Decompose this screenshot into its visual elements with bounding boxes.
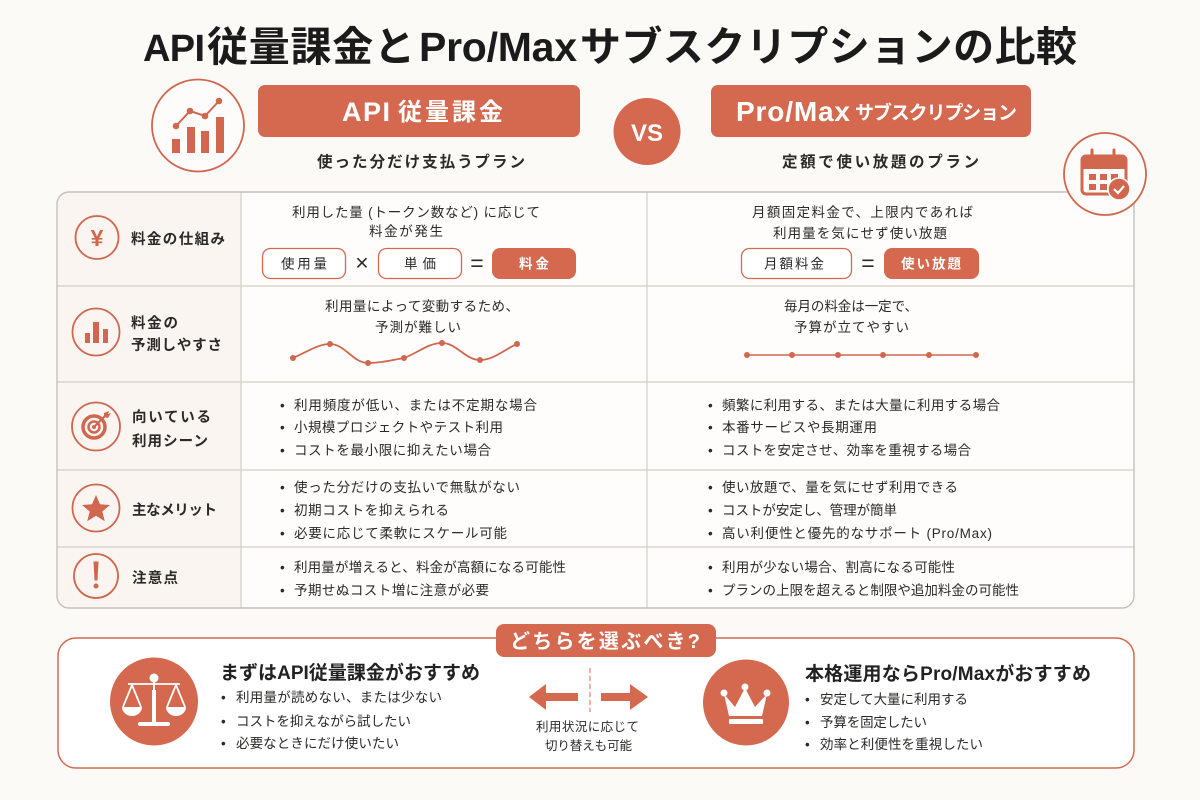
- note: switching: [536, 719, 639, 753]
- API list: 初期コストを抑えられる: [294, 503, 449, 518]
- Pro/Max formula: 月額料金: [764, 256, 824, 272]
- label: 利用シーン: [132, 433, 208, 450]
- recommendation: API: コストを抑えながら試したい: [236, 714, 411, 729]
- Pro/Max list: •: [708, 526, 713, 541]
- API description: 利用した量 (トークン数など) に応じて: [292, 205, 540, 220]
- Pro/Max list: •: [708, 583, 713, 598]
- row: predictability: [72, 299, 979, 366]
- API list: 小規模プロジェクトやテスト利用: [294, 420, 503, 435]
- Pro/Max list: 頻繁に利用する、または大量に利用する場合: [722, 398, 1000, 413]
- icon: scales: [110, 658, 198, 746]
- recommendation: Pro/Max: 効率と利便性を重視したい: [820, 737, 983, 752]
- Pro/Max list: [708, 479, 992, 541]
- header: API plan: API: [342, 97, 390, 127]
- header: API plan: 従量課金: [398, 99, 503, 126]
- Pro/Max formula: =: [861, 250, 875, 276]
- recommendation: Pro/Max: •: [805, 692, 810, 707]
- API list: •: [280, 443, 285, 458]
- row: use cases: [72, 398, 1000, 458]
- note: switching: 切り替えも可能: [545, 738, 632, 753]
- recommendation: API: [220, 661, 480, 751]
- header: Pro/Max plan: Pro/Max: [736, 96, 850, 127]
- API list: [280, 398, 538, 458]
- recommendation: Pro/Max: •: [805, 737, 810, 752]
- chart: flat cost line: [744, 352, 979, 358]
- API formula: =: [470, 250, 484, 276]
- API formula: 単価: [404, 256, 436, 272]
- recommendation: API: まずはAPI従量課金がおすすめ: [220, 661, 480, 684]
- Pro/Max list: •: [708, 560, 713, 575]
- recommendation: API: •: [221, 690, 226, 705]
- title: サブスクリプションの比較: [580, 24, 1077, 70]
- panel: which to choose: [58, 624, 1134, 768]
- API list: 利用頻度が低い、または不定期な場合: [294, 398, 538, 413]
- Pro/Max list: •: [708, 398, 713, 413]
- recommendation: Pro/Max: [805, 662, 1091, 752]
- API list: コストを最小限に抑えたい場合: [294, 443, 492, 458]
- API list: •: [280, 583, 285, 598]
- subtitle: API plan: 使った分だけ支払うプラン: [317, 153, 525, 171]
- chart: variable cost line: [290, 340, 520, 366]
- API formula: 使用量: [281, 256, 327, 272]
- Pro/Max list: 高い利便性と優先的なサポート (Pro/Max): [722, 525, 992, 541]
- recommendation: Pro/Max: 予算を固定したい: [820, 715, 927, 730]
- label: 予測しやすさ: [131, 336, 222, 354]
- Pro/Max list: プランの上限を超えると制限や追加料金の可能性: [722, 583, 1019, 598]
- recommendation: API: 必要なときにだけ使いたい: [236, 735, 399, 751]
- Pro/Max list: •: [708, 443, 713, 458]
- icon: crown: [703, 660, 789, 746]
- Pro/Max list: [708, 559, 1019, 598]
- Pro/Max list: •: [708, 420, 713, 435]
- Pro/Max list: 本番サービスや長期運用: [722, 420, 877, 435]
- API list: 予期せぬコスト増に注意が必要: [294, 583, 489, 598]
- Pro/Max description: 毎月の料金は一定で、: [784, 299, 918, 314]
- row: cautions: [74, 554, 1019, 598]
- API list: •: [280, 420, 285, 435]
- icon: yen: [76, 216, 118, 259]
- row: pricing mechanism: 料金が発生: [369, 224, 443, 239]
- header: Pro/Max plan: [711, 85, 1031, 137]
- recommendation: API: 利用量が読めない、または少ない: [236, 690, 442, 705]
- recommendation: Pro/Max: 本格運用ならPro/Maxがおすすめ: [805, 662, 1091, 685]
- API list: •: [280, 398, 285, 413]
- icon: calendar with check: [1064, 133, 1146, 215]
- header: Pro/Max plan: サブスクリプション: [855, 101, 1017, 124]
- API list: •: [280, 480, 285, 495]
- tag: which to choose: どちらを選ぶべき?: [510, 630, 700, 653]
- icon: exclamation: [74, 554, 118, 598]
- label: 向いている: [132, 409, 211, 426]
- Pro/Max list: コストを安定させ、効率を重視する場合: [722, 443, 972, 458]
- icon: target: [72, 402, 120, 450]
- Pro/Max list: 利用が少ない場合、割高になる可能性: [722, 559, 955, 575]
- recommendation: API: •: [221, 714, 226, 729]
- row: predictability: 予測が難しい: [375, 320, 461, 335]
- Pro/Max description: 月額固定料金で、上限内であれば: [752, 205, 974, 220]
- Pro/Max list: 使い放題で、量を気にせず利用できる: [722, 479, 958, 495]
- icon: bar chart with trend line: [152, 80, 244, 172]
- API description: 利用量によって変動するため、: [325, 299, 519, 314]
- icon: yen: ¥: [91, 225, 104, 251]
- API list: [280, 559, 566, 598]
- API formula: ×: [355, 250, 369, 276]
- panel: comparison table: [57, 192, 1134, 608]
- row: pricing mechanism: [76, 205, 979, 279]
- label: 主なメリット: [132, 501, 217, 519]
- recommendation: API: •: [221, 736, 226, 751]
- VS badge: [614, 98, 680, 165]
- row: pricing mechanism: 利用量を気にせず使い放題: [773, 225, 948, 241]
- note: switching: 利用状況に応じて: [536, 719, 639, 734]
- API formula: 料金: [519, 256, 550, 272]
- label: [131, 314, 222, 354]
- API list: •: [280, 560, 285, 575]
- API list: [280, 479, 520, 541]
- title: 従量課金と: [207, 24, 415, 70]
- arrows: switch either way: [529, 668, 648, 712]
- API list: •: [280, 526, 285, 541]
- header: API plan: [258, 85, 580, 137]
- API list: •: [280, 503, 285, 518]
- Pro/Max formula: 使い放題: [901, 256, 962, 272]
- subtitle: Pro/Max plan: 定額で使い放題のプラン: [782, 153, 979, 171]
- API formula: [262, 248, 576, 279]
- VS badge: VS: [631, 120, 663, 147]
- Pro/Max list: •: [708, 503, 713, 518]
- row: merits: [72, 479, 992, 541]
- label: 料金の: [131, 314, 178, 332]
- Pro/Max list: コストが安定し、管理が簡単: [722, 503, 897, 518]
- recommendation: Pro/Max: 安定して大量に利用する: [820, 692, 968, 707]
- Pro/Max list: •: [708, 480, 713, 495]
- label: [132, 409, 211, 450]
- title: API: [143, 28, 205, 70]
- label: 注意点: [132, 569, 178, 587]
- Pro/Max list: [708, 398, 1000, 458]
- recommendation: Pro/Max: •: [805, 715, 810, 730]
- icon: star: [72, 484, 120, 532]
- label: 料金の仕組み: [131, 230, 225, 248]
- title: [143, 24, 1077, 70]
- row: predictability: 予算が立てやすい: [794, 320, 909, 335]
- API list: 利用量が増えると、料金が高額になる可能性: [294, 559, 566, 575]
- title: Pro/Max: [419, 24, 577, 70]
- tag: which to choose: [496, 624, 716, 657]
- icon: small bars: [72, 308, 120, 356]
- API list: 使った分だけの支払いで無駄がない: [294, 479, 520, 495]
- Pro/Max formula: [742, 248, 979, 279]
- API list: 必要に応じて柔軟にスケール可能: [294, 526, 508, 541]
